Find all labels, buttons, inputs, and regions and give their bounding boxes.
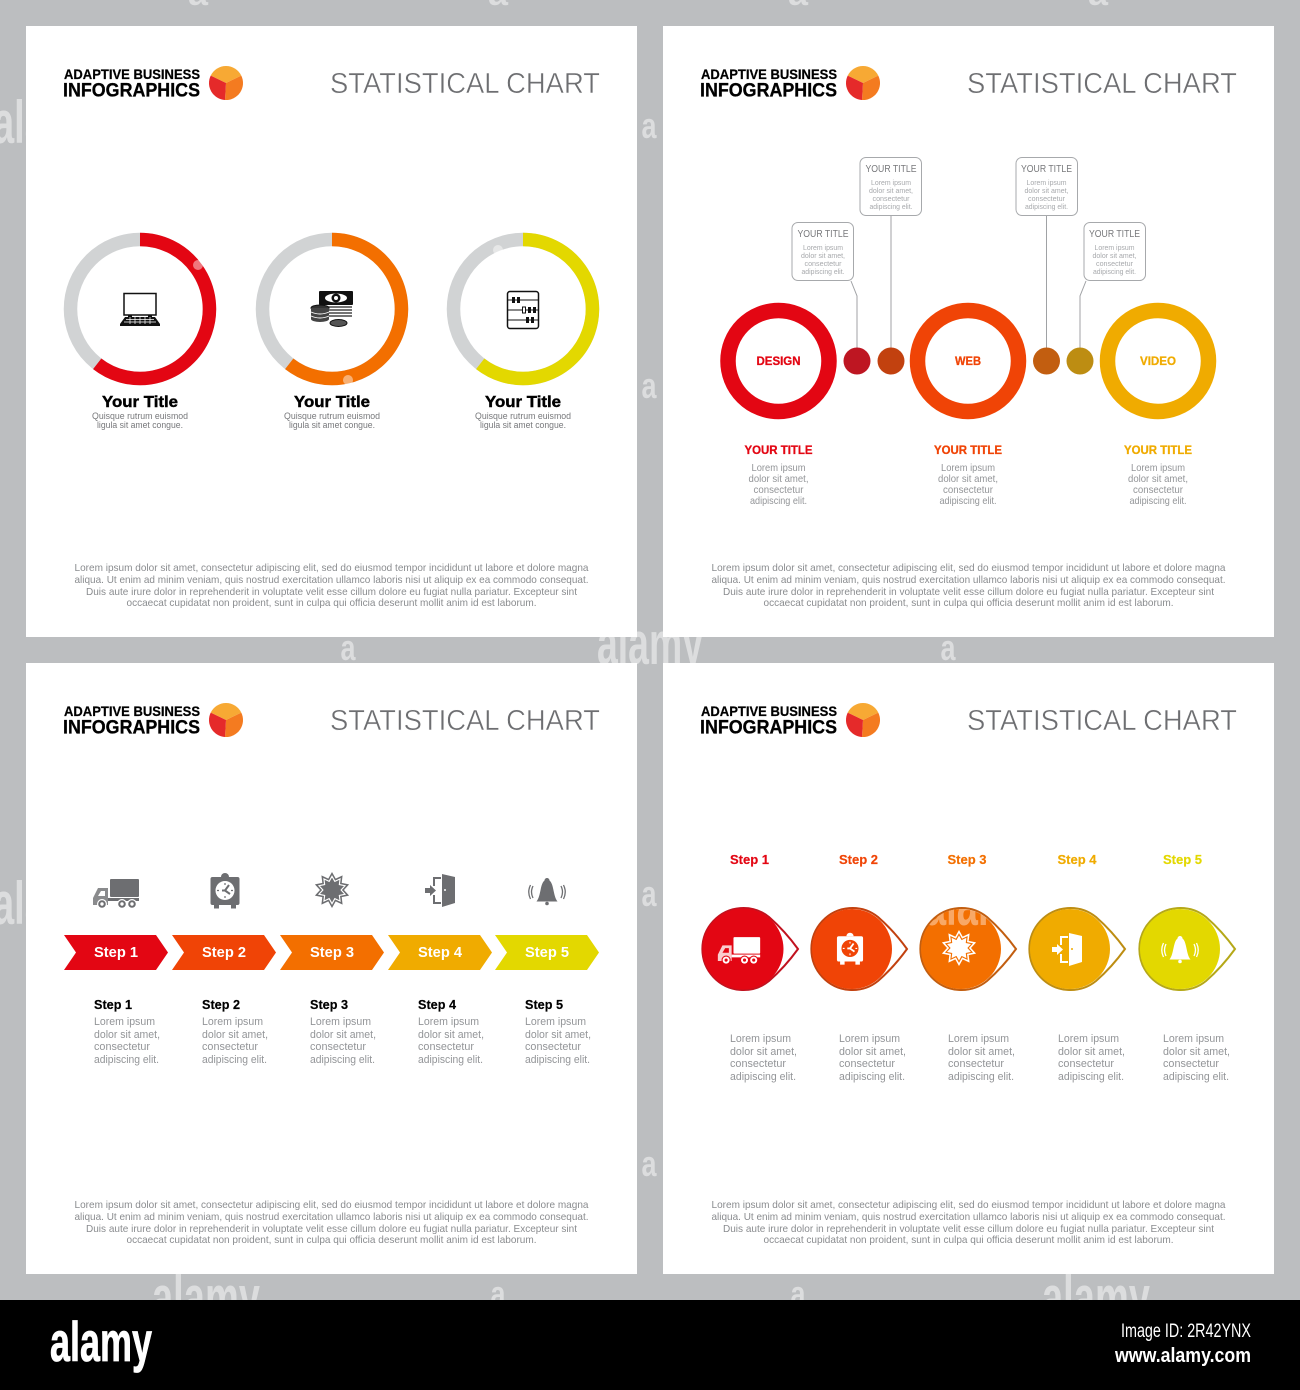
callout 1 with connector: dolor sit amet,	[801, 251, 845, 260]
ring: video	[1108, 310, 1208, 412]
chevron: step 5	[495, 935, 599, 970]
chevron: step 2: Step 2	[202, 945, 246, 961]
text block: video: adipiscing elit.	[1130, 495, 1186, 507]
teardrop text 4: consectetur	[1058, 1058, 1114, 1070]
step label 2: Step 2	[839, 852, 878, 867]
chevron: step 2	[172, 935, 276, 970]
donut 2 caption: ligula sit amet congue.	[289, 420, 375, 430]
callout 4 with connector: Lorem ipsum	[1094, 243, 1134, 252]
ring: video: VIDEO	[1140, 354, 1176, 368]
step label 5: Step 5	[1163, 852, 1202, 867]
chevron: step 5: Step 5	[525, 945, 569, 961]
chevron: step 4	[388, 935, 492, 970]
donut 1 caption	[92, 394, 188, 430]
step text 3: dolor sit amet,	[310, 1029, 376, 1041]
icon: door	[425, 874, 455, 907]
ring: design: DESIGN	[756, 354, 800, 368]
step text 5	[525, 997, 591, 1066]
donut 1 caption: ligula sit amet congue.	[97, 420, 183, 430]
text block: video: YOUR TITLE	[1124, 443, 1192, 457]
teardrop text 2	[839, 1033, 906, 1083]
step text 1	[94, 997, 160, 1066]
ring: web: WEB	[955, 354, 981, 368]
step text 2: dolor sit amet,	[202, 1029, 268, 1041]
teardrop text 5: consectetur	[1163, 1058, 1219, 1070]
chevron: step 1	[64, 935, 168, 970]
icon: bell	[529, 878, 565, 905]
header: logo and chart title	[700, 703, 1237, 738]
watermark fragments in gutters: a	[642, 1143, 657, 1184]
callout 2 with connector	[860, 158, 922, 374]
watermark fragments in gutters: a	[790, 1273, 806, 1314]
teardrop text 4: Lorem ipsum	[1058, 1033, 1119, 1045]
donut 2 caption	[284, 394, 380, 430]
teardrop 3 with starburst	[919, 907, 1018, 991]
text block: design: dolor sit amet,	[748, 473, 808, 485]
step text 4: Step 4	[418, 997, 457, 1012]
icon: starburst	[315, 872, 349, 908]
text block: video: consectetur	[1133, 484, 1183, 496]
text block: web: consectetur	[943, 484, 993, 496]
watermark fragments in gutters: a	[340, 627, 356, 668]
watermark fragments in gutters: a	[490, 1273, 506, 1314]
teardrop text 2: consectetur	[839, 1058, 895, 1070]
step text 3: adipiscing elit.	[310, 1054, 375, 1066]
step text 3: Lorem ipsum	[310, 1016, 371, 1028]
chevron: step 3	[280, 935, 384, 970]
text block: web: YOUR TITLE	[934, 443, 1002, 457]
step text 3: Step 3	[310, 997, 348, 1012]
teardrop text 3: adipiscing elit.	[948, 1071, 1014, 1083]
donut 1 caption: Your Title	[102, 394, 178, 411]
step text 4	[418, 997, 484, 1066]
donut 3 caption: Your Title	[485, 394, 561, 411]
text block: design: Lorem ipsum	[752, 462, 806, 474]
ring: web	[918, 310, 1018, 412]
donut 1 caption: Quisque rutrum euismod	[92, 411, 188, 421]
step text 4: consectetur	[418, 1041, 474, 1053]
teardrop text 4: adipiscing elit.	[1058, 1071, 1124, 1083]
callout 3 with connector: dolor sit amet,	[1024, 186, 1068, 195]
step text 3	[310, 997, 376, 1066]
step text 1: Step 1	[94, 997, 132, 1012]
teardrop text 2: dolor sit amet,	[839, 1046, 906, 1058]
text block: design: adipiscing elit.	[750, 495, 807, 507]
callout 3 with connector: Lorem ipsum	[1026, 178, 1066, 187]
text block: design: consectetur	[754, 484, 804, 496]
chevron: step 4: Step 4	[418, 945, 462, 961]
teardrop text 1: adipiscing elit.	[730, 1071, 796, 1083]
callout 2 with connector: consectetur	[872, 194, 910, 203]
ring: design	[728, 310, 829, 412]
donut 3 caption	[475, 394, 571, 430]
callout 4 with connector	[1066, 222, 1146, 374]
panel: chevron steps	[26, 663, 637, 1274]
footer bar: alamy credit	[0, 1300, 1300, 1390]
donut 1 with laptop icon	[70, 240, 210, 378]
watermark fragments in gutters: alamy	[597, 610, 703, 677]
step text 1: consectetur	[94, 1041, 150, 1053]
website: www.alamy.com	[1114, 1345, 1251, 1367]
watermark fragments in gutters: alamy	[152, 1264, 260, 1331]
alamy logo: alamy	[50, 1310, 152, 1373]
step text 4: adipiscing elit.	[418, 1054, 483, 1066]
teardrop text 2: Lorem ipsum	[839, 1033, 900, 1045]
teardrop text 5	[1163, 1033, 1230, 1083]
donut 2 caption: Your Title	[294, 394, 370, 411]
donut 3 caption: ligula sit amet congue.	[480, 420, 566, 430]
callout 3 with connector: consectetur	[1028, 194, 1065, 203]
callout 2 with connector: YOUR TITLE	[866, 164, 917, 175]
step text 2: consectetur	[202, 1041, 258, 1053]
panel: design web video rings	[663, 26, 1274, 637]
teardrop text 3: Lorem ipsum	[948, 1033, 1009, 1045]
teardrop text 1: consectetur	[730, 1058, 786, 1070]
header: logo and chart title	[700, 66, 1237, 102]
step text 2: Step 2	[202, 997, 240, 1012]
teardrop 2 with safe	[811, 908, 907, 990]
text block: video: Lorem ipsum	[1131, 462, 1185, 474]
callout 2 with connector: adipiscing elit.	[870, 202, 912, 211]
icon: safe	[210, 873, 240, 908]
text block: web	[934, 443, 1002, 507]
text block: design	[744, 443, 812, 507]
teardrop text 3: dolor sit amet,	[948, 1046, 1015, 1058]
step text 2	[202, 997, 268, 1066]
icon: truck	[93, 879, 139, 909]
text block: web: dolor sit amet,	[938, 473, 998, 485]
callout 2 with connector: dolor sit amet,	[869, 186, 913, 195]
text block: web: Lorem ipsum	[941, 462, 995, 474]
step text 5: Lorem ipsum	[525, 1016, 586, 1028]
chevron: step 1: Step 1	[94, 945, 138, 961]
step text 1: adipiscing elit.	[94, 1054, 159, 1066]
callout 4 with connector: consectetur	[1096, 259, 1133, 268]
callout 1 with connector: YOUR TITLE	[798, 229, 849, 240]
callout 3 with connector	[1016, 158, 1078, 374]
callout 1 with connector: consectetur	[804, 259, 842, 268]
teardrop text 2: adipiscing elit.	[839, 1071, 905, 1083]
step label 1: Step 1	[730, 852, 769, 867]
teardrop text 4: dolor sit amet,	[1058, 1046, 1125, 1058]
step text 2: Lorem ipsum	[202, 1016, 263, 1028]
teardrop 3 with starburst: alamy	[925, 871, 1033, 938]
footer paragraph	[74, 1199, 589, 1246]
teardrop text 1	[730, 1033, 797, 1083]
chevron: step 3: Step 3	[310, 945, 354, 961]
step text 1: dolor sit amet,	[94, 1029, 160, 1041]
watermark fragments in gutters: alamy	[1042, 1264, 1150, 1331]
donut 3 with abacus icon	[454, 240, 592, 378]
teardrop text 3: consectetur	[948, 1058, 1004, 1070]
footer paragraph	[712, 562, 1226, 609]
callout 3 with connector: YOUR TITLE	[1021, 164, 1072, 175]
teardrop 5 with bell	[1139, 908, 1235, 990]
teardrop text 5: adipiscing elit.	[1163, 1071, 1229, 1083]
step text 5: dolor sit amet,	[525, 1029, 591, 1041]
text block: video	[1124, 443, 1192, 507]
image id: Image ID: 2R42YNX	[1121, 1321, 1251, 1342]
header: logo and chart title	[63, 66, 600, 102]
step text 2: adipiscing elit.	[202, 1054, 267, 1066]
teardrop text 3	[948, 1033, 1015, 1083]
text block: web: adipiscing elit.	[940, 495, 996, 507]
callout 1 with connector	[792, 222, 870, 374]
donut 2 with money icon	[262, 240, 402, 385]
step text 5: consectetur	[525, 1041, 581, 1053]
callout 4 with connector: dolor sit amet,	[1092, 251, 1136, 260]
callout 1 with connector: Lorem ipsum	[803, 243, 843, 252]
donut 2 caption: Quisque rutrum euismod	[284, 411, 380, 421]
step text 3: consectetur	[310, 1041, 366, 1053]
step text 5: adipiscing elit.	[525, 1054, 590, 1066]
text block: video: dolor sit amet,	[1128, 473, 1188, 485]
step label 4: Step 4	[1058, 852, 1097, 867]
teardrop text 5: dolor sit amet,	[1163, 1046, 1230, 1058]
teardrop text 1: dolor sit amet,	[730, 1046, 797, 1058]
callout 2 with connector: Lorem ipsum	[871, 178, 911, 187]
panel: donut charts	[26, 26, 637, 637]
teardrop text 5: Lorem ipsum	[1163, 1033, 1224, 1045]
teardrop text 4	[1058, 1033, 1125, 1083]
watermark fragments in gutters: a	[642, 105, 657, 146]
callout 4 with connector: YOUR TITLE	[1089, 229, 1140, 240]
step text 1: Lorem ipsum	[94, 1016, 155, 1028]
panel: teardrop steps	[663, 663, 1274, 1274]
watermark fragments in gutters: a	[940, 627, 956, 668]
teardrop 4 with door	[1029, 908, 1125, 990]
teardrop text 1: Lorem ipsum	[730, 1033, 791, 1045]
footer paragraph	[74, 562, 589, 609]
teardrop 1 with truck	[702, 908, 798, 990]
step text 4: dolor sit amet,	[418, 1029, 484, 1041]
step text 4: Lorem ipsum	[418, 1016, 479, 1028]
header: logo and chart title	[63, 703, 600, 738]
text block: design: YOUR TITLE	[744, 443, 812, 457]
watermark fragments in gutters: a	[642, 873, 657, 914]
step label 3: Step 3	[948, 852, 986, 867]
donut 3 caption: Quisque rutrum euismod	[475, 411, 571, 421]
watermark fragments in gutters: a	[642, 365, 657, 406]
callout 4 with connector: adipiscing elit.	[1093, 267, 1136, 276]
callout 3 with connector: adipiscing elit.	[1025, 202, 1068, 211]
footer paragraph	[712, 1199, 1226, 1246]
callout 1 with connector: adipiscing elit.	[802, 267, 844, 276]
step text 5: Step 5	[525, 997, 563, 1012]
